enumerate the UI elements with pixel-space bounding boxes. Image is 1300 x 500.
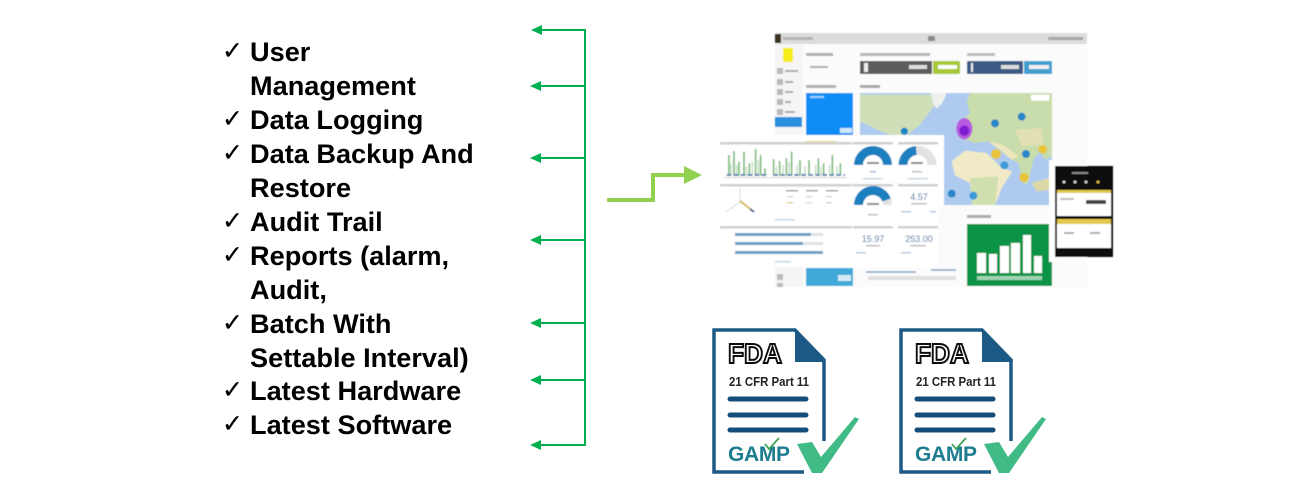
document outline xyxy=(901,330,1011,472)
south-east asia islands xyxy=(1032,178,1052,191)
item: data backup and restore: Restore xyxy=(250,172,351,203)
FDA logo: FDA xyxy=(728,338,782,369)
3D axes plot xyxy=(726,188,755,212)
metric values: 253.00 xyxy=(905,234,933,244)
dashboard screenshots collage xyxy=(718,33,1113,287)
item: audit trail: Audit Trail xyxy=(250,206,383,237)
compliance document 2 xyxy=(901,330,1046,473)
north america xyxy=(860,95,935,136)
cyan tile xyxy=(806,268,853,286)
green check mark xyxy=(984,417,1046,473)
FDA logo: FDA xyxy=(915,338,969,369)
item: latest hardware: ✓ xyxy=(222,375,243,404)
eurasia xyxy=(958,93,1052,185)
metric values: 15.97 xyxy=(862,234,884,244)
regulation label: 21 CFR Part 11 xyxy=(916,374,996,389)
text lines xyxy=(917,399,993,430)
item: user management: User xyxy=(250,36,310,67)
main dashboard window xyxy=(775,33,1087,287)
horizontal bars xyxy=(735,233,823,262)
item: reports: ✓ xyxy=(222,240,243,269)
greenland xyxy=(931,93,947,109)
item: data backup and restore: Data Backup And xyxy=(250,138,474,169)
item: data logging: Data Logging xyxy=(250,104,423,135)
donut gauges xyxy=(858,150,932,205)
item: data backup and restore xyxy=(222,138,474,203)
item: user management: ✓ xyxy=(222,36,243,65)
compliance document 1 xyxy=(714,330,859,473)
item: latest hardware: Latest Hardware xyxy=(250,375,461,406)
item: latest software: ✓ xyxy=(222,409,243,438)
item: user management: Management xyxy=(250,70,416,101)
green check mark xyxy=(797,417,859,473)
text lines xyxy=(730,399,806,430)
item: reports: Audit, xyxy=(250,274,327,305)
blue tile xyxy=(806,93,853,137)
overlay analytics panel xyxy=(718,135,944,267)
section titles xyxy=(806,53,833,56)
africa xyxy=(952,151,1012,205)
feature checklist xyxy=(222,36,474,440)
item: batch with settable interval: Batch With xyxy=(250,308,391,339)
document outline xyxy=(714,330,824,472)
sparkline strip xyxy=(866,270,956,272)
stepped arrow pointing to the dashboard xyxy=(607,166,702,200)
world map xyxy=(860,93,1052,205)
GAMP logo: GAMP xyxy=(728,443,790,466)
sidebar xyxy=(775,44,803,287)
item: user management xyxy=(222,36,416,101)
item: data logging: ✓ xyxy=(222,104,243,133)
item: batch with settable interval: Settable Interval) xyxy=(250,342,469,373)
stat tiles xyxy=(860,61,932,74)
regulation label: 21 CFR Part 11 xyxy=(729,374,809,389)
phone screenshot xyxy=(1049,160,1113,262)
folded corner xyxy=(795,330,826,362)
item: batch with settable interval: ✓ xyxy=(222,308,243,337)
item: reports: Reports (alarm, xyxy=(250,240,449,271)
bracket of green arrows pointing to the list xyxy=(530,25,586,450)
metric values xyxy=(862,192,933,244)
item: latest software: Latest Software xyxy=(250,409,452,440)
GAMP logo: GAMP xyxy=(915,443,977,466)
metric values: 4.57 xyxy=(910,192,928,202)
item: audit trail: ✓ xyxy=(222,206,243,235)
folded corner xyxy=(982,330,1013,362)
item: data backup and restore: ✓ xyxy=(222,138,243,167)
line chart with green spikes xyxy=(724,149,847,178)
item: batch with settable interval xyxy=(222,308,469,373)
cluster markers xyxy=(956,118,972,139)
green bar tile xyxy=(967,215,1052,286)
item: reports xyxy=(222,240,449,305)
